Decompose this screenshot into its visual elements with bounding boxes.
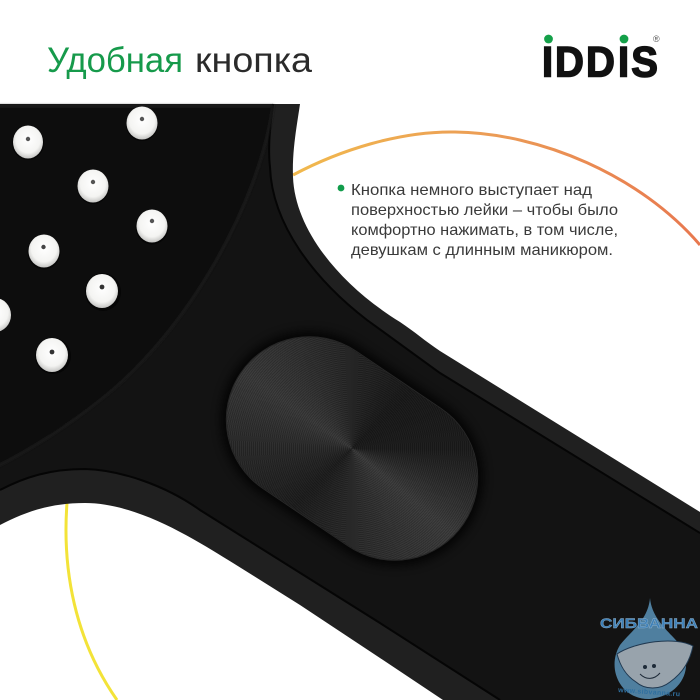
callout text — [338, 182, 618, 259]
title dark word: кнопка — [195, 41, 313, 80]
spray face of the head — [0, 106, 273, 468]
watermark water drop — [615, 598, 686, 699]
decorative orange arc — [293, 132, 700, 245]
logo green dot — [620, 35, 628, 43]
textured metal button — [195, 305, 509, 591]
logo green dot — [544, 35, 553, 43]
nozzle — [0, 298, 11, 332]
watermark url: www.sibvanna.ru — [617, 687, 680, 698]
nozzle — [77, 170, 109, 204]
description line 4: девушкам с длинным маникюром. — [351, 242, 613, 259]
watermark: Sibvanna logo — [600, 598, 698, 699]
title — [47, 41, 313, 80]
watermark bathtub — [617, 641, 693, 688]
spray nozzles — [0, 106, 168, 374]
nozzle — [126, 106, 158, 141]
green bullet — [338, 185, 344, 191]
title green word: Удобная — [47, 41, 183, 80]
logo wordmark: IDDIS — [542, 37, 658, 86]
IDDIS logo — [542, 34, 660, 86]
watermark tub face — [640, 664, 660, 678]
decorative yellow arc — [66, 503, 117, 700]
watermark name: СИБВАННА — [600, 615, 698, 631]
nozzle — [85, 273, 121, 311]
description line 3: комфортно нажимать, в том числе, — [351, 222, 618, 239]
description line 2: поверхностью лейки – чтобы было — [351, 202, 618, 219]
nozzle — [35, 338, 71, 374]
logo registered mark: ® — [653, 34, 660, 44]
description line 1: Кнопка немного выступает над — [351, 182, 593, 199]
nozzle — [136, 210, 168, 244]
nozzle — [28, 234, 60, 270]
nozzle — [12, 126, 44, 160]
